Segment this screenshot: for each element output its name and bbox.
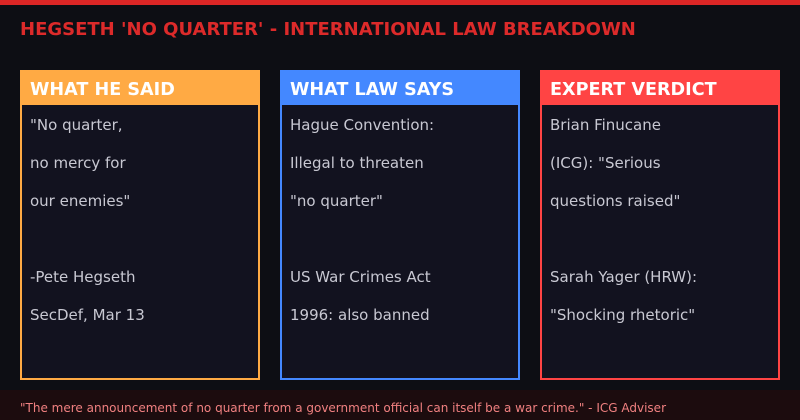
footer quote [0, 390, 800, 420]
text: law [290, 116, 434, 324]
text: experts: (ICG): "Serious [550, 154, 661, 172]
text: quote: "No quarter, [30, 116, 122, 134]
text: law: "no quarter" [290, 192, 383, 210]
text: quote: no mercy for [30, 154, 126, 172]
heading: what law says: WHAT LAW SAYS [290, 80, 454, 100]
text: quote: -Pete Hegseth [30, 268, 136, 286]
heading: what he said: WHAT HE SAID [30, 80, 175, 100]
text: quote: SecDef, Mar 13 [30, 306, 145, 324]
text: law: Hague Convention: [290, 116, 434, 134]
text: experts: questions raised" [550, 192, 680, 210]
text: law: Illegal to threaten [290, 154, 424, 172]
text: quote [30, 116, 145, 324]
footer quote: "The mere announcement of no quarter from a government official can itself be a war crime." - ICG Adviser [20, 401, 666, 415]
heading: expert verdict: EXPERT VERDICT [550, 80, 717, 100]
text: law: 1996: also banned [290, 306, 430, 324]
text: experts: "Shocking rhetoric" [550, 306, 695, 324]
panel: expert verdict [540, 70, 780, 379]
title: HEGSETH 'NO QUARTER' - INTERNATIONAL LAW BREAKDOWN [20, 19, 636, 40]
text: quote: our enemies" [30, 192, 130, 210]
text: experts: Brian Finucane [550, 116, 661, 134]
text: experts [550, 116, 697, 324]
panel: what he said [20, 70, 260, 379]
text: experts: Sarah Yager (HRW): [550, 268, 697, 286]
panel: what law says [280, 70, 520, 379]
text: law: US War Crimes Act [290, 268, 431, 286]
